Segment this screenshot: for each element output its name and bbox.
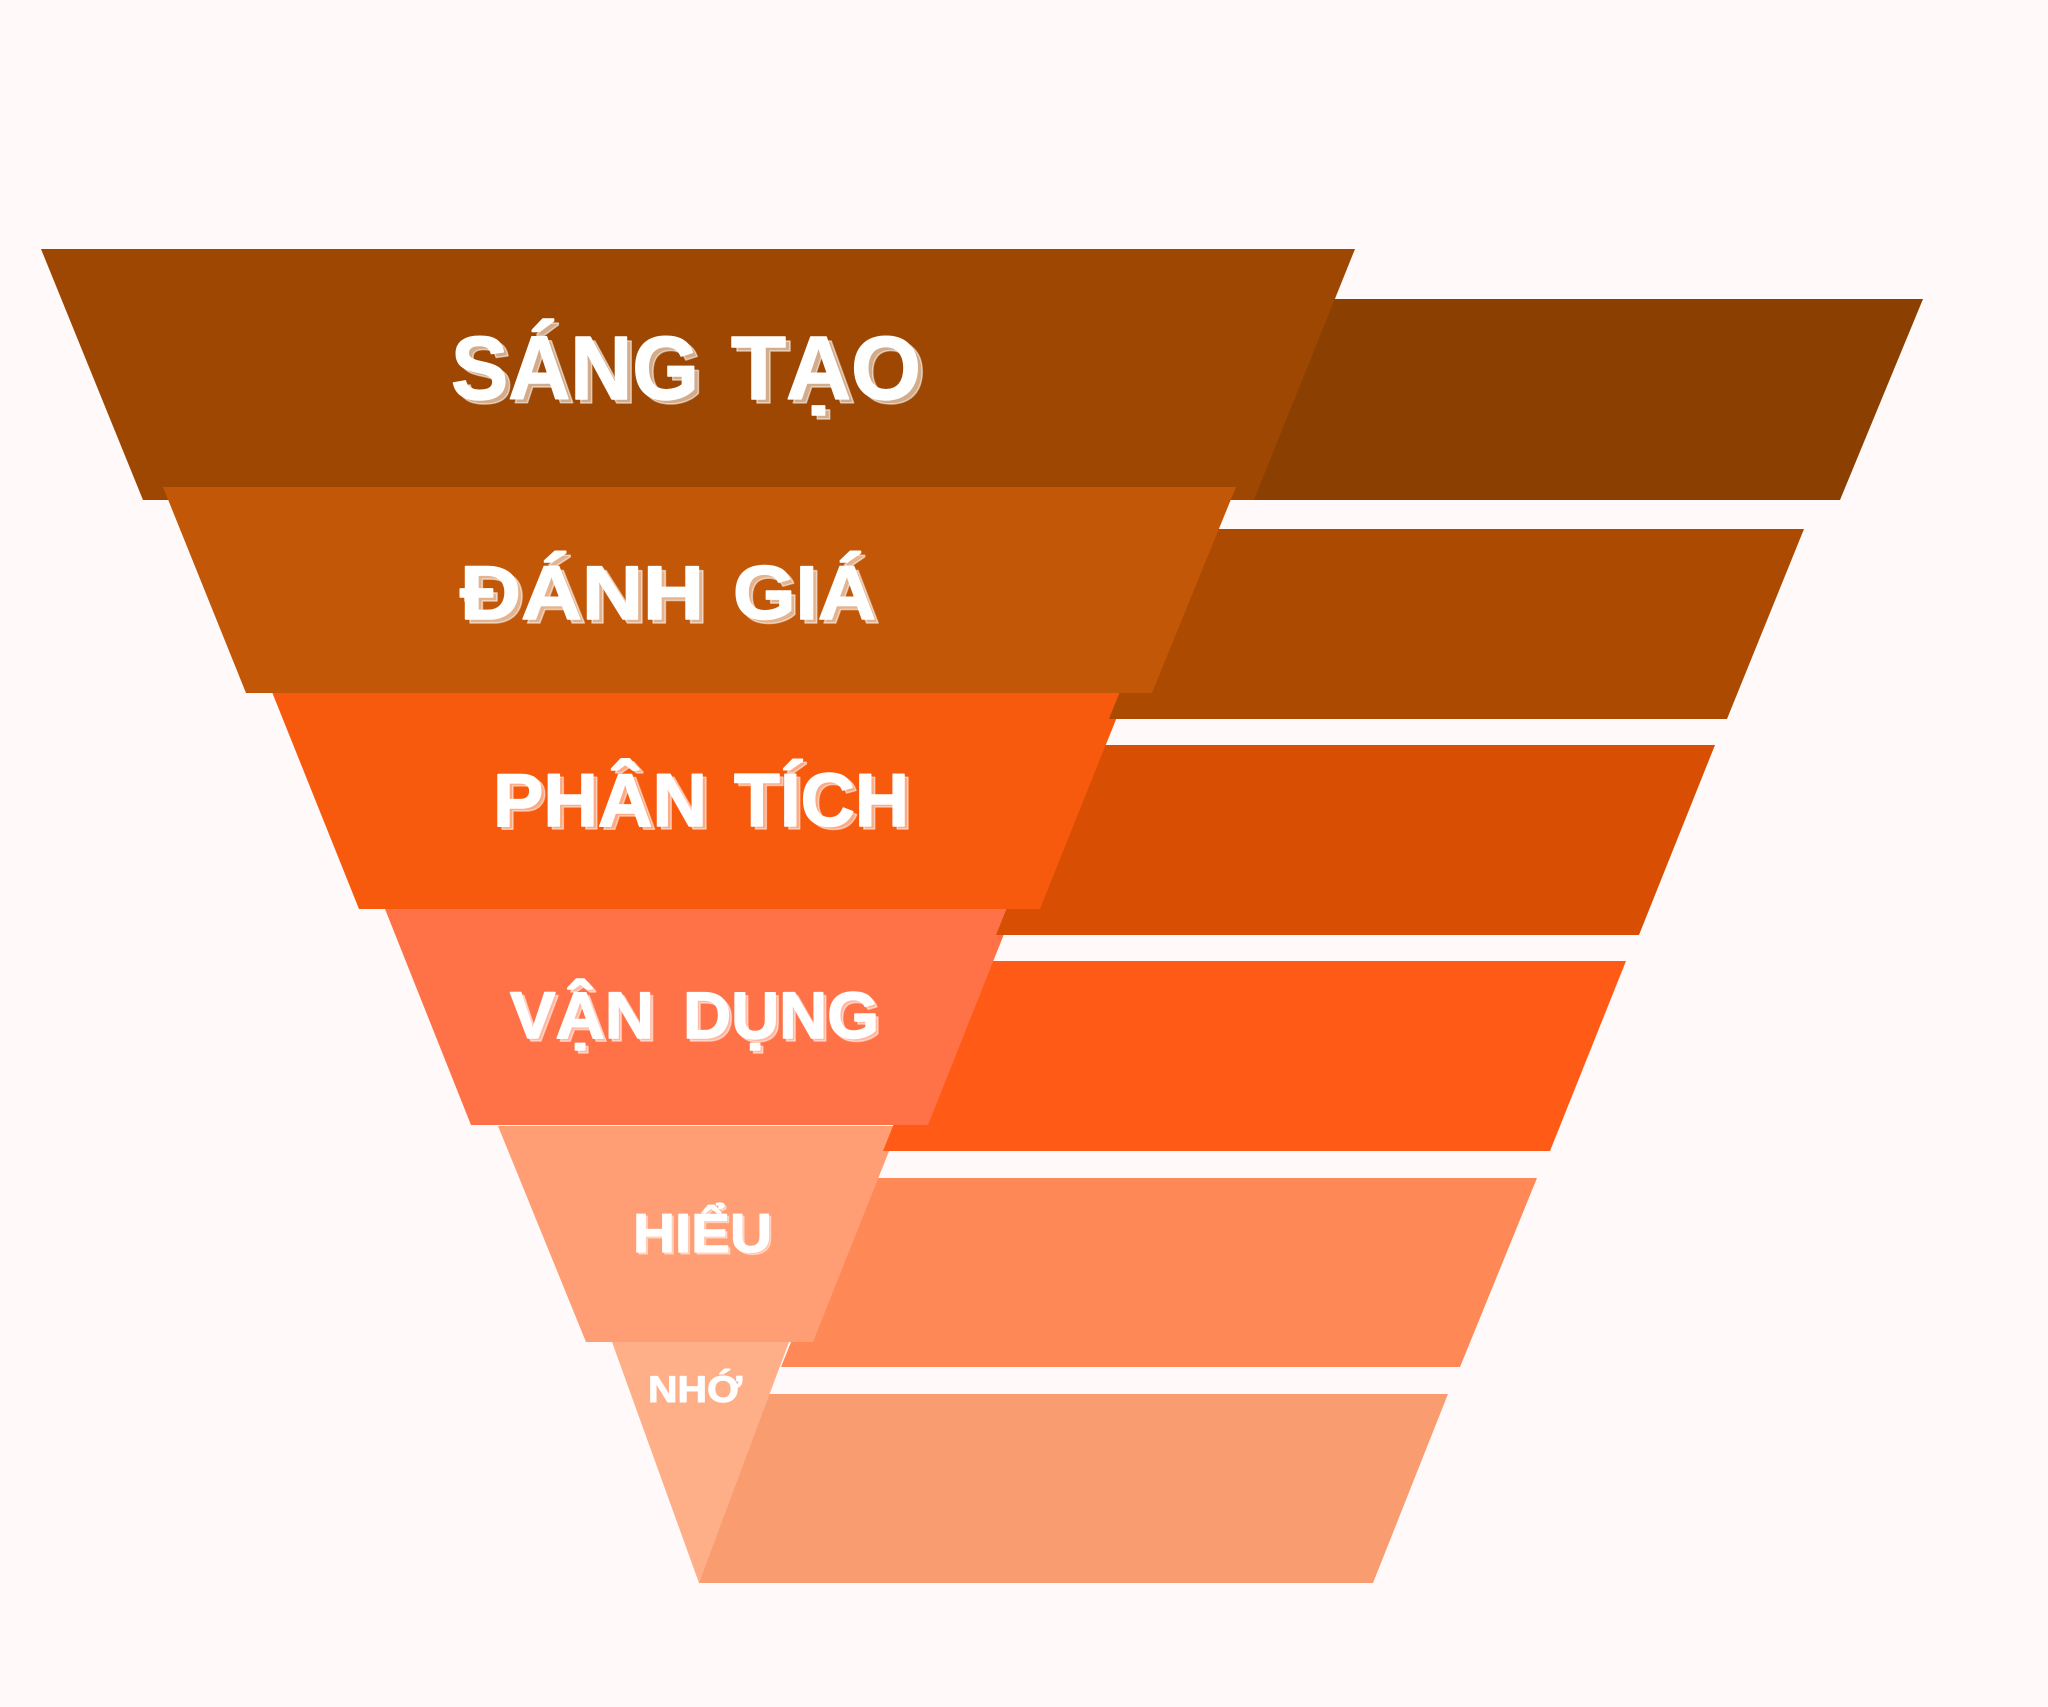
tier shape: sáng tạo — [41, 249, 1355, 500]
back band: vận dụng — [883, 961, 1626, 1151]
label: đánh giá: GIÁ — [733, 551, 876, 636]
label: vận dụng: DỤNG — [683, 978, 879, 1052]
back band: đánh giá — [1109, 529, 1804, 719]
label: hiểu: HIỂU — [633, 1202, 772, 1264]
tier shape: vận dụng — [385, 909, 1014, 1125]
label: phân tích — [493, 758, 909, 842]
back band: hiểu — [781, 1178, 1537, 1367]
label: sáng tạo: SÁNG — [451, 318, 699, 419]
label: nhớ: NHỚ — [648, 1368, 742, 1410]
back band: sáng tạo — [1210, 299, 1923, 500]
tier shape: phân tích — [272, 692, 1127, 909]
label: phân tích: TÍCH — [734, 758, 909, 842]
back band: phân tích — [996, 745, 1715, 935]
label: vận dụng: VẬN — [510, 978, 654, 1052]
back band: nhớ — [699, 1394, 1448, 1583]
label: phân tích: PHÂN — [493, 758, 707, 842]
label: vận dụng — [510, 978, 879, 1052]
tier shape: nhớ — [612, 1342, 789, 1583]
label: đánh giá — [460, 551, 876, 636]
label: sáng tạo: TẠO — [731, 319, 921, 419]
label: sáng tạo — [451, 318, 921, 419]
tier shape: hiểu — [498, 1126, 899, 1342]
label: đánh giá: ĐÁNH — [460, 551, 704, 636]
tier shape: đánh giá — [163, 487, 1236, 693]
